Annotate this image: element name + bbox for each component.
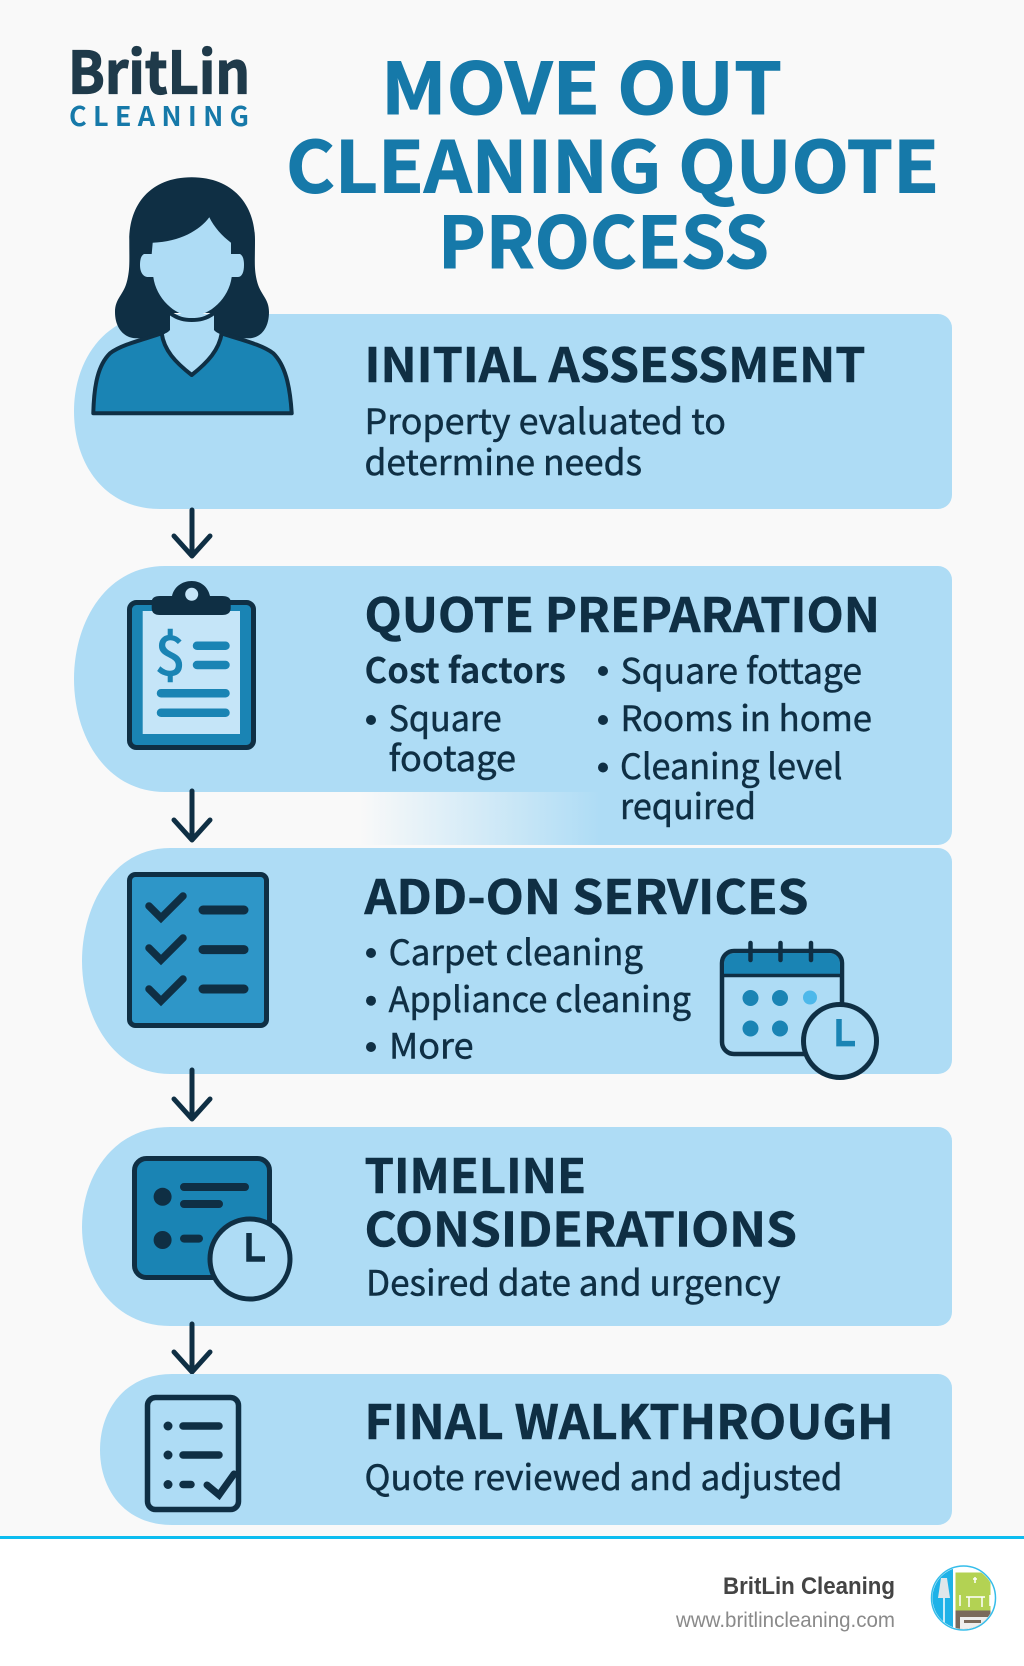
panel: initial assessment xyxy=(74,314,952,509)
text: initial assessment description: Property evaluated to xyxy=(364,394,726,445)
text: initial assessment description xyxy=(364,394,726,486)
title: MOVE OUT xyxy=(381,33,782,135)
list: add-on services xyxy=(366,925,691,1070)
list: add-on services: Carpet cleaning xyxy=(389,925,643,976)
footer: company name and website xyxy=(675,1573,895,1632)
list: add-on services: More xyxy=(389,1019,474,1070)
text: timeline description: Desired date and urgency xyxy=(366,1256,780,1307)
title: CLEANING QUOTE xyxy=(286,112,939,214)
list: right cost factors xyxy=(598,644,872,830)
arrow: step 3 to 4 xyxy=(174,1070,210,1119)
icon: footer round logo xyxy=(932,1566,996,1631)
text: initial assessment description: determine needs xyxy=(364,435,642,486)
list: right cost factors: Square fottage xyxy=(620,644,862,694)
icon: document with check xyxy=(148,1398,238,1510)
heading: timeline considerations xyxy=(364,1138,797,1261)
icon: clipboard with dollar sign xyxy=(130,581,254,748)
arrow: step 2 to 3 xyxy=(174,791,210,840)
icon: checklist xyxy=(130,874,266,1026)
panel: timeline considerations xyxy=(82,1127,952,1326)
heading: final walkthrough: FINAL WALKTHROUGH xyxy=(364,1384,894,1453)
icon: clipboard with dollar sign: $ xyxy=(155,612,185,691)
heading: timeline considerations: CONSIDERATIONS xyxy=(364,1192,797,1261)
heading: quote preparation: QUOTE PREPARATION xyxy=(364,577,880,646)
title: PROCESS xyxy=(438,187,769,289)
icon: calendar with clock xyxy=(722,943,876,1078)
text: cost factors label: Cost factors xyxy=(364,643,566,694)
list: right cost factors: required xyxy=(620,779,756,830)
arrow: step 1 to 2 xyxy=(174,510,210,556)
arrow: step 4 to 5 xyxy=(174,1324,210,1372)
list: left cost factor xyxy=(366,691,516,782)
footer: company name and website: BritLin Cleaning xyxy=(723,1573,895,1600)
panel: add-on services xyxy=(82,848,952,1074)
icon: woman avatar xyxy=(93,177,292,413)
text: final walkthrough description: Quote reviewed and adjusted xyxy=(364,1450,842,1501)
list: left cost factor: footage xyxy=(389,731,516,782)
title xyxy=(286,33,939,289)
icon: schedule list with clock xyxy=(134,1158,290,1299)
heading: add-on services: ADD-ON SERVICES xyxy=(363,859,808,928)
list: left cost factor: Square xyxy=(389,691,502,742)
heading: timeline considerations: TIMELINE xyxy=(364,1138,586,1207)
panel: quote preparation xyxy=(74,566,952,845)
panel: final walkthrough xyxy=(100,1374,952,1525)
heading: initial assessment: INITIAL ASSESSMENT xyxy=(364,327,866,396)
list: right cost factors: Rooms in home xyxy=(620,691,872,742)
logo: BritLin Cleaning: CLEANING xyxy=(69,95,249,134)
list: add-on services: Appliance cleaning xyxy=(389,972,691,1023)
logo: BritLin Cleaning: BritLin xyxy=(68,26,250,110)
footer: company name and website: www.britlincleaning.com xyxy=(675,1609,895,1632)
list: right cost factors: Cleaning level xyxy=(620,739,842,790)
